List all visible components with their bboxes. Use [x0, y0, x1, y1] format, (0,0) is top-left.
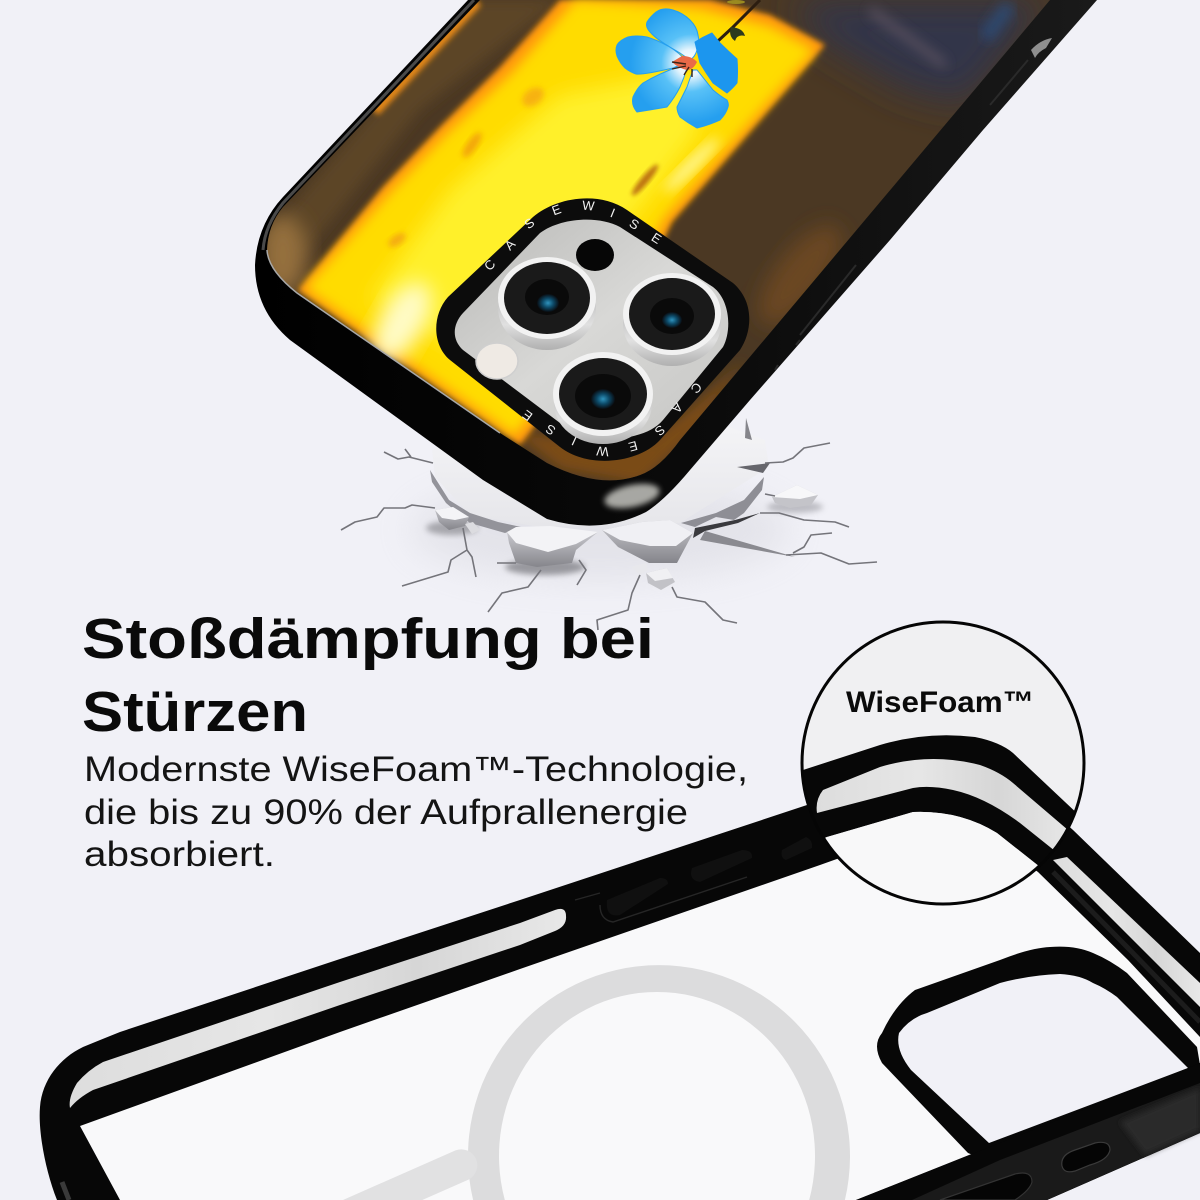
CASEWISE lettering: A	[501, 236, 518, 253]
CASEWISE lettering: C	[688, 380, 705, 397]
camera plate	[455, 220, 728, 438]
CASEWISE lettering: A	[669, 400, 686, 416]
chunk centre right	[602, 520, 693, 563]
stem	[718, 0, 760, 41]
grey wedge	[737, 463, 770, 473]
camera cutout	[877, 947, 1200, 1160]
CASEWISE lettering: W	[582, 198, 596, 214]
front petal	[695, 33, 738, 93]
CASEWISE lettering: I	[569, 434, 579, 449]
frame highlight left	[263, 0, 474, 250]
camera cutout window	[898, 974, 1188, 1143]
crack lines	[341, 443, 877, 630]
flower	[616, 0, 760, 128]
band texture	[1120, 1088, 1200, 1155]
frame inner rim	[267, 250, 500, 433]
top phone with case	[250, 0, 1097, 526]
CASEWISE lettering: S	[543, 421, 558, 438]
bottom band	[856, 1063, 1200, 1200]
body text: Modernste WiseFoam™-Technologie,	[84, 750, 748, 789]
CASEWISE lettering: E	[649, 230, 664, 247]
camera module	[436, 198, 749, 461]
CASEWISE lettering: E	[519, 407, 535, 424]
bottom clear case	[40, 739, 1200, 1200]
heading	[82, 607, 654, 744]
body text: die bis zu 90% der Aufprallenergie	[84, 793, 688, 832]
dark crack gap	[693, 513, 760, 538]
case frame	[255, 0, 1097, 526]
black case frame	[40, 739, 1200, 1200]
side buttons	[575, 837, 812, 922]
magnified frame detail	[804, 735, 1074, 866]
CASEWISE lettering: S	[521, 215, 538, 232]
chunk centre left	[505, 526, 598, 575]
leaf	[730, 27, 745, 41]
CASEWISE lettering: C	[481, 256, 498, 273]
side button detail	[775, 60, 1028, 370]
CASEWISE lettering: S	[651, 422, 668, 439]
magsafe ring	[468, 965, 850, 1200]
bud	[727, 0, 745, 4]
CASEWISE lettering: I	[608, 205, 617, 220]
lower small chunks	[631, 563, 675, 590]
chunk right small	[767, 485, 823, 513]
port slot	[940, 1173, 1032, 1200]
right foam strip	[1053, 857, 1200, 1007]
back panel artwork	[267, 0, 1050, 480]
flower centre	[672, 56, 697, 70]
lanyard hole	[62, 1182, 69, 1200]
right plate side	[681, 477, 764, 527]
side button gloss	[1031, 38, 1052, 58]
frame corner gloss	[602, 479, 662, 513]
petals	[616, 9, 728, 128]
raised plate	[432, 380, 769, 527]
WiseFoam label: WiseFoam™	[846, 686, 1034, 719]
CASEWISE lettering: S	[627, 215, 642, 233]
stamens	[672, 62, 692, 77]
left foam strip	[70, 909, 566, 1108]
lidar	[576, 239, 614, 271]
alignment pill	[343, 1149, 477, 1200]
magnifier circle: WiseFoam	[790, 622, 1100, 910]
lens one	[498, 257, 596, 350]
camera ring	[436, 198, 749, 461]
heading: Stoßdämpfung bei	[82, 607, 654, 671]
heading: Stürzen	[82, 680, 308, 744]
flash	[476, 343, 518, 379]
lens three	[553, 352, 653, 444]
CASEWISE lettering	[481, 198, 705, 459]
circle outline	[802, 622, 1084, 904]
left plate side	[430, 470, 521, 533]
band shading	[912, 1083, 1200, 1200]
CASEWISE lettering: E	[627, 438, 639, 455]
cracked ground illustration	[341, 380, 877, 630]
CASEWISE lettering: E	[550, 201, 563, 218]
CASEWISE lettering: W	[595, 443, 609, 459]
clear interior	[80, 815, 1200, 1200]
mic slot	[1062, 1142, 1110, 1172]
lens two	[623, 273, 721, 366]
body text: absorbiert.	[84, 835, 275, 874]
right foam strip gap	[1053, 872, 1200, 1022]
long wedge	[700, 531, 795, 557]
chunk left small	[426, 507, 480, 535]
top spike	[745, 418, 752, 440]
body text	[84, 750, 748, 874]
